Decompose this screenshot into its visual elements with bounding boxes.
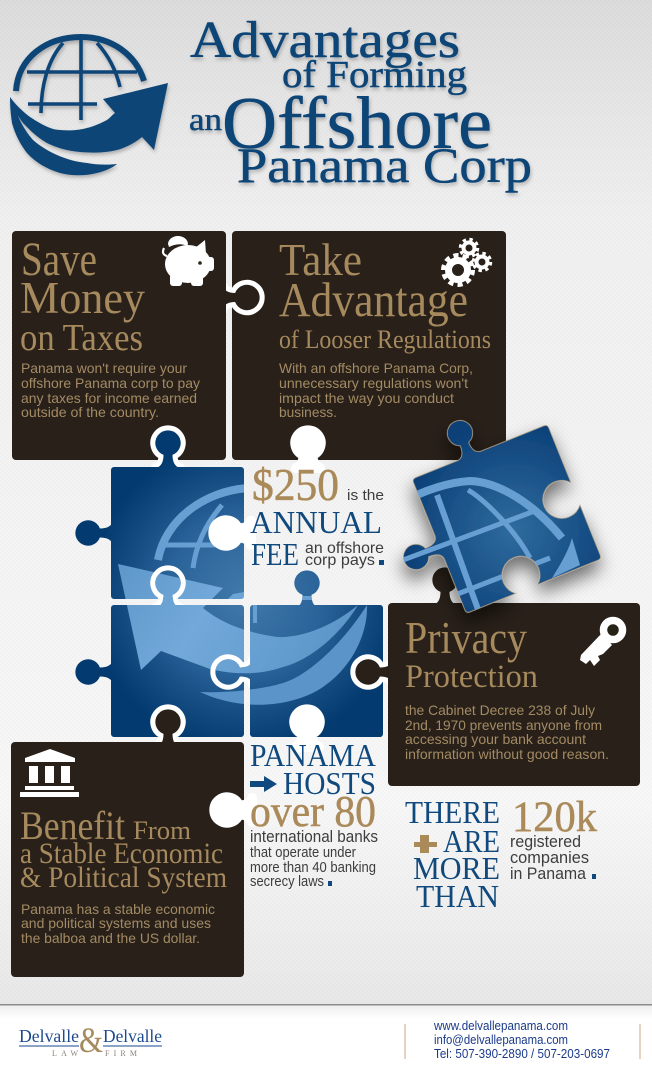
callout: annual fee: FEE: [251, 536, 299, 572]
callout: registered companies: ARE: [443, 823, 500, 859]
panel text: take advantage: With an offshore Panama Corp,: [279, 360, 473, 376]
white hole in upper left piece: [213, 520, 251, 546]
callout: banks: international banks: [250, 827, 378, 846]
white hole in benefit panel: [214, 797, 252, 823]
callout: banks: secrecy laws: [250, 874, 324, 890]
panel: privacy protection: accessing your bank account: [405, 731, 586, 747]
callout: banks: over 80: [250, 787, 376, 836]
panel text: take advantage: impact the way you conduct: [279, 390, 454, 406]
puzzle piece: lower left blue: [75, 570, 244, 737]
panel: privacy protection: [388, 603, 640, 786]
panel text: take advantage: [279, 234, 491, 420]
callout: banks: HOSTS: [283, 765, 376, 801]
callout: annual fee: is the: [347, 487, 384, 504]
panel text: save money: [20, 233, 200, 420]
panel: benefit: [11, 742, 244, 977]
title: Panama Corp: [237, 137, 532, 193]
footer contact details: info@delvallepanama.com: [434, 1033, 568, 1047]
callout: registered companies: [405, 794, 597, 914]
panel: privacy protection: Privacy: [405, 613, 527, 663]
callout: annual fee: $250: [252, 460, 339, 510]
panel text: save money: Money: [20, 273, 145, 323]
panel: benefit: a Stable Economic: [20, 837, 223, 870]
panel text: take advantage: business.: [279, 404, 337, 420]
panel: privacy protection: Protection: [405, 659, 538, 695]
panel text: save money: outside of the country.: [21, 404, 159, 420]
white ring around blue tab: [155, 430, 181, 468]
icon: gears: [444, 240, 490, 284]
privacy panel top tab: [432, 567, 458, 605]
panel text: take advantage: Take: [279, 234, 362, 285]
title: Advantages: [190, 12, 460, 69]
callout: registered companies: companies: [510, 848, 589, 867]
callout: annual fee: an offshore: [305, 540, 384, 557]
callout: annual fee: corp pays: [305, 552, 375, 569]
panel text: save money: on Taxes: [20, 317, 143, 359]
panel: benefit: & Political System: [20, 861, 227, 894]
white hole in lower right piece: [294, 709, 320, 747]
callout: registered companies: THERE: [405, 794, 500, 830]
puzzle piece: lower right blue: [215, 570, 383, 737]
callout: annual fee: [250, 460, 384, 572]
white ring around lower left piece tab: [155, 570, 181, 608]
callout: banks: [250, 737, 378, 890]
white hole in the take advantage panel: [295, 430, 321, 468]
icon: piggy bank: [163, 236, 214, 286]
panel: benefit: the balboa and the US dollar.: [21, 930, 200, 946]
footer logo: &: [79, 1020, 103, 1060]
privacy panel side tab: [355, 659, 393, 685]
callout: registered companies: THAN: [416, 878, 499, 914]
footer contact details: Tel: 507-390-2890 / 507-203-0697: [434, 1047, 610, 1061]
footer logo: Delvalle: [19, 1026, 79, 1046]
white ring around benefit tab: [155, 709, 181, 747]
callout: registered companies: MORE: [413, 850, 500, 886]
callout: banks: more than 40 banking: [250, 860, 376, 876]
title: [189, 12, 532, 193]
footer logo: Delvalle: [103, 1026, 162, 1046]
footer contact details: [433, 1019, 610, 1061]
panel text: save money: Panama won't require your: [21, 360, 187, 376]
callout: banks: that operate under: [250, 845, 356, 861]
icon: key: [580, 620, 622, 666]
title: an: [189, 101, 222, 137]
title: Offshore: [222, 83, 492, 165]
footer logo: LAW: [52, 1049, 78, 1058]
panel: benefit: and political systems and uses: [21, 915, 211, 931]
white ring around lower right piece tab: [215, 659, 253, 685]
callout: banks: PANAMA: [250, 737, 376, 773]
puzzle tab joining the top panels: [222, 285, 260, 310]
panel: privacy protection: information without good reason.: [405, 746, 609, 762]
panel: benefit: Benefit: [20, 803, 125, 848]
panel text: take advantage: of Looser Regulations: [279, 325, 491, 354]
footer logo: [19, 1020, 162, 1060]
callout: registered companies: registered: [510, 832, 581, 851]
callout: registered companies: in Panama: [510, 864, 587, 883]
icon: bank building: [20, 749, 79, 797]
footer contact details: www.delvallepanama.com: [433, 1019, 568, 1033]
callout: registered companies: 120k: [512, 794, 597, 841]
panel: privacy protection: the Cabinet Decree 238 of July: [405, 702, 595, 718]
panel text: save money: Save: [21, 233, 97, 286]
puzzle piece: upper left blue: [75, 430, 244, 599]
panel text: save money: offshore Panama corp to pay: [21, 375, 200, 391]
panel: benefit: Panama has a stable economic: [21, 901, 215, 917]
panel text: take advantage: unnecessary regulations won't: [279, 375, 468, 391]
panel text: take advantage: Advantage: [279, 272, 468, 327]
panel text: save money: any taxes for income earned: [21, 390, 197, 406]
panel: save money background: [12, 231, 226, 460]
footer: [0, 1004, 652, 1075]
title: of Forming: [282, 54, 467, 96]
panel: take advantage background: [232, 231, 506, 460]
callout: annual fee: ANNUAL: [250, 504, 382, 540]
footer logo: FIRM: [105, 1049, 137, 1058]
panel: benefit: From: [133, 816, 191, 845]
icon: globe and arrow logo: [10, 36, 168, 175]
puzzle piece: rotated loose piece: [392, 420, 611, 621]
panel: privacy protection: 2nd, 1970 prevents anyone from: [405, 717, 602, 733]
